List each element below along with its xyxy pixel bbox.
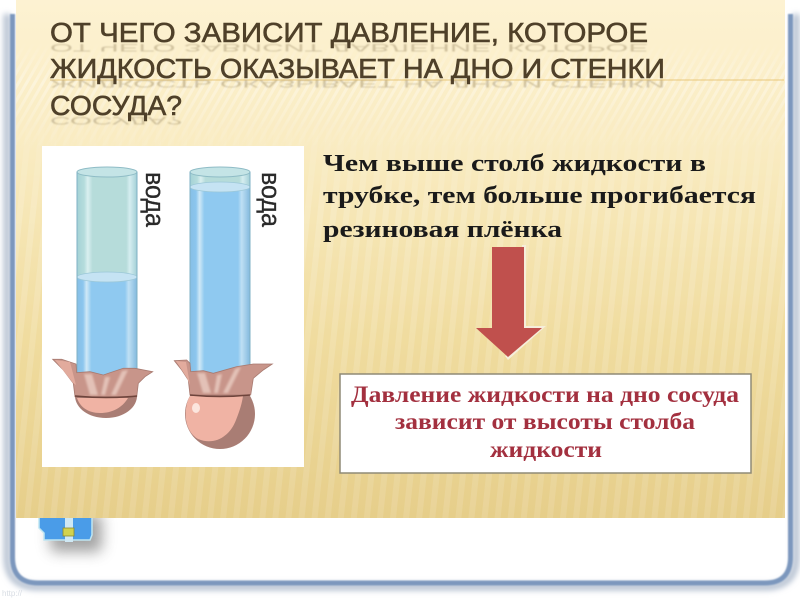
arrow: down bbox=[476, 245, 546, 360]
title: СОСУДА? bbox=[50, 90, 182, 121]
label: water, left: вода bbox=[140, 172, 168, 228]
tube: low water column bbox=[77, 167, 137, 380]
title: СОСУДА? bbox=[50, 114, 182, 127]
balloon: large bulge bbox=[174, 360, 272, 449]
callout: conclusion bbox=[340, 374, 751, 473]
callout: conclusion: зависит от высоты столба bbox=[395, 409, 696, 434]
callout: conclusion: жидкости bbox=[490, 437, 602, 462]
title: ЖИДКОСТЬ ОКАЗЫВАЕТ НА ДНО И СТЕНКИ bbox=[50, 77, 665, 90]
callout: conclusion: Давление жидкости на дно сосуда bbox=[351, 382, 740, 407]
title: ОТ ЧЕГО ЗАВИСИТ ДАВЛЕНИЕ, КОТОРОЕ bbox=[50, 41, 648, 54]
balloon: small bulge bbox=[53, 359, 153, 418]
text block: observation: трубке, тем больше прогибается bbox=[323, 182, 756, 209]
text block: observation: резиновая плёнка bbox=[323, 216, 562, 243]
text block: observation: Чем выше столб жидкости в bbox=[323, 150, 706, 177]
label: water, right: вода bbox=[256, 172, 284, 228]
tube: high water column bbox=[190, 167, 250, 380]
title: ОТ ЧЕГО ЗАВИСИТ ДАВЛЕНИЕ, КОТОРОЕ bbox=[50, 17, 648, 48]
title bbox=[50, 17, 665, 127]
title: ЖИДКОСТЬ ОКАЗЫВАЕТ НА ДНО И СТЕНКИ bbox=[50, 53, 665, 84]
text block: observation bbox=[323, 150, 756, 243]
panel: tubes illustration bbox=[42, 146, 304, 467]
source link: http:// bbox=[2, 589, 23, 598]
icon: blue badge bbox=[39, 510, 102, 552]
